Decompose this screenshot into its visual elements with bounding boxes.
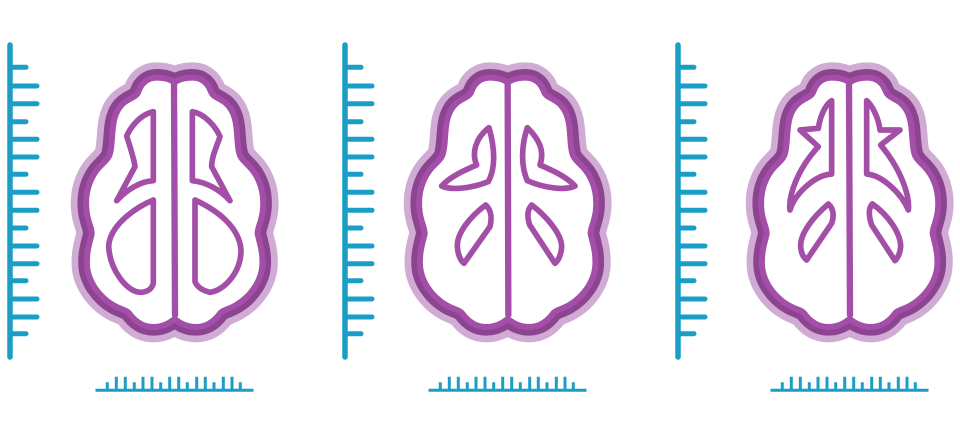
brain 2 ventricles <box>442 128 575 263</box>
panel: brain 2 <box>422 81 593 324</box>
panel: brain 1 <box>89 81 260 324</box>
horizontal ruler 1 <box>96 377 254 390</box>
brain 1 ventricles <box>109 112 241 292</box>
vertical ruler 3 <box>678 45 705 357</box>
horizontal ruler 2 <box>428 377 586 390</box>
vertical ruler 2 <box>345 45 372 357</box>
vertical ruler 1 <box>10 45 37 357</box>
horizontal ruler 3 <box>770 377 928 390</box>
brain 3 midline <box>849 83 850 315</box>
panel: brain 3 <box>764 81 935 324</box>
brain 3 outline <box>764 81 935 324</box>
brain 3 ventricles <box>790 101 909 261</box>
brain 2 midline <box>498 83 518 315</box>
brain 1 midline <box>174 83 175 315</box>
brain 2 outline <box>422 81 593 324</box>
brain 1 outline <box>89 81 260 324</box>
